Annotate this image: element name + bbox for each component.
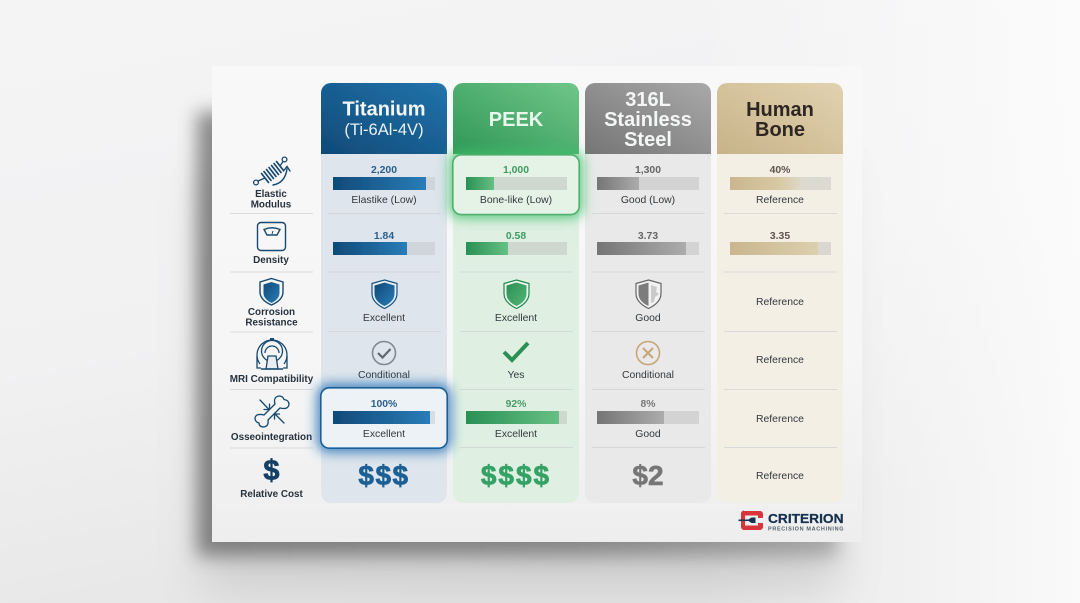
row label: MRI compatibility: MRI Compatibility	[230, 374, 314, 385]
cell: MRI compatibility	[504, 343, 528, 381]
row label: elastic modulus: Modulus	[251, 200, 292, 210]
paper sheet with shadow	[197, 66, 862, 590]
highlighted cell: PEEK elastic modulus: Bone-like (Low)	[480, 195, 552, 206]
cell: elastic modulus: 40%	[770, 165, 790, 176]
row label: corrosion resistance	[245, 278, 298, 328]
panel: PEEK column	[453, 83, 579, 503]
cell: MRI compatibility: Conditional	[622, 370, 674, 381]
row label: osseointegration: Osseointegration	[231, 432, 312, 443]
row label: relative cost	[240, 455, 303, 500]
highlighted cell: Titanium osseointegration	[317, 384, 451, 452]
icon: MRI scanner	[257, 338, 287, 369]
header: 316L Stainless Steel: 316L	[625, 89, 671, 111]
cell: corrosion resistance	[363, 280, 405, 324]
logo: Criterion Precision Machining: CRITERION	[768, 512, 844, 526]
panel: 316L stainless steel column	[585, 83, 711, 503]
cell: density	[730, 231, 831, 255]
panel: human bone column	[717, 83, 843, 503]
highlighted cell: Titanium osseointegration: Excellent	[363, 429, 405, 440]
header: 316L Stainless Steel: Stainless	[604, 109, 692, 131]
header: PEEK: PEEK	[489, 109, 544, 131]
header: 316L Stainless Steel: Steel	[624, 129, 672, 151]
row label: corrosion resistance: Resistance	[245, 318, 298, 328]
cell: elastic modulus	[333, 165, 435, 206]
cell: osseointegration	[466, 399, 567, 440]
panel: row labels	[230, 157, 314, 500]
cell: MRI compatibility: Conditional	[358, 370, 410, 381]
cell: density: 1.84	[374, 231, 394, 242]
icon: red C mark	[738, 510, 763, 530]
row label: elastic modulus: Elastic	[255, 189, 287, 200]
logo: Criterion Precision Machining	[738, 510, 844, 532]
cell: elastic modulus: Reference	[756, 195, 804, 206]
column body	[453, 150, 579, 503]
header: human bone	[717, 83, 843, 154]
header: Titanium: Titanium	[343, 98, 425, 120]
cell: MRI compatibility: Yes	[508, 370, 524, 381]
cell: osseointegration: 8%	[640, 399, 656, 410]
icon: scale	[258, 222, 286, 250]
icon: spring	[254, 157, 290, 185]
cell: osseointegration	[597, 399, 699, 440]
header: Titanium: (Ti-6Al-4V)	[344, 121, 424, 139]
row label: elastic modulus	[251, 157, 292, 210]
row label: relative cost: Relative Cost	[240, 489, 303, 500]
cell: elastic modulus: Elastike (Low)	[351, 195, 417, 206]
cell: relative cost: Reference	[756, 471, 804, 482]
icon: shield	[260, 278, 283, 305]
cell: elastic modulus: 2,200	[371, 165, 397, 176]
cell: MRI compatibility	[622, 342, 674, 381]
icon: bone with arrows	[255, 396, 289, 427]
highlighted cell: Titanium osseointegration: 100%	[371, 399, 397, 410]
icon: green check	[504, 343, 528, 360]
cell: osseointegration: Good	[635, 429, 661, 440]
column body	[321, 150, 447, 503]
cell: relative cost: $$$$	[481, 460, 551, 491]
column body	[717, 150, 843, 503]
row label: osseointegration	[231, 396, 312, 443]
header: 316L Stainless Steel	[585, 83, 711, 154]
cell: density	[466, 231, 567, 255]
column body	[585, 150, 711, 503]
cell: density: 0.58	[506, 231, 526, 242]
cell: elastic modulus: Good (Low)	[621, 195, 675, 206]
logo: Criterion Precision Machining: PRECISION MACHINING	[768, 526, 844, 532]
cell: elastic modulus	[730, 165, 831, 206]
cell: density: 3.35	[770, 231, 790, 242]
icon: dollar: $	[263, 455, 280, 487]
cell: corrosion resistance: Excellent	[495, 313, 537, 324]
cell: density: 3.73	[638, 231, 658, 242]
cell: osseointegration: Excellent	[495, 429, 537, 440]
cell: corrosion resistance: Reference	[756, 297, 804, 308]
cell: corrosion resistance: Excellent	[363, 313, 405, 324]
row label: MRI compatibility	[230, 338, 314, 385]
row label: density: Density	[253, 255, 289, 266]
cell: osseointegration: 92%	[506, 399, 526, 410]
cell: density	[597, 231, 699, 255]
row label: corrosion resistance: Corrosion	[248, 307, 295, 318]
highlighted cell: PEEK elastic modulus	[449, 151, 583, 218]
highlighted cell: PEEK elastic modulus: 1,000	[503, 165, 529, 176]
header: human bone: Human	[746, 99, 814, 121]
header: PEEK	[453, 83, 579, 154]
cell: corrosion resistance	[635, 280, 661, 324]
row label: density	[253, 222, 289, 266]
icon: blue shield	[372, 280, 397, 308]
icon: grey shield	[636, 280, 661, 308]
header: Titanium	[321, 83, 447, 154]
icon: green shield	[504, 280, 529, 308]
cell: osseointegration: Reference	[756, 414, 804, 425]
cell: relative cost: $2	[632, 460, 664, 491]
cell: elastic modulus: 1,300	[635, 165, 661, 176]
panel: Titanium column	[321, 83, 447, 503]
cell: density	[333, 231, 435, 255]
cell: MRI compatibility	[358, 342, 410, 381]
icon: grey check circle	[372, 342, 396, 364]
cell: corrosion resistance: Good	[635, 313, 661, 324]
cell: corrosion resistance	[495, 280, 537, 324]
cell: relative cost: $$$	[358, 460, 410, 491]
cell: elastic modulus	[597, 165, 699, 206]
cell: MRI compatibility: Reference	[756, 355, 804, 366]
icon: tan cross circle	[636, 342, 660, 364]
header: human bone: Bone	[755, 119, 805, 141]
